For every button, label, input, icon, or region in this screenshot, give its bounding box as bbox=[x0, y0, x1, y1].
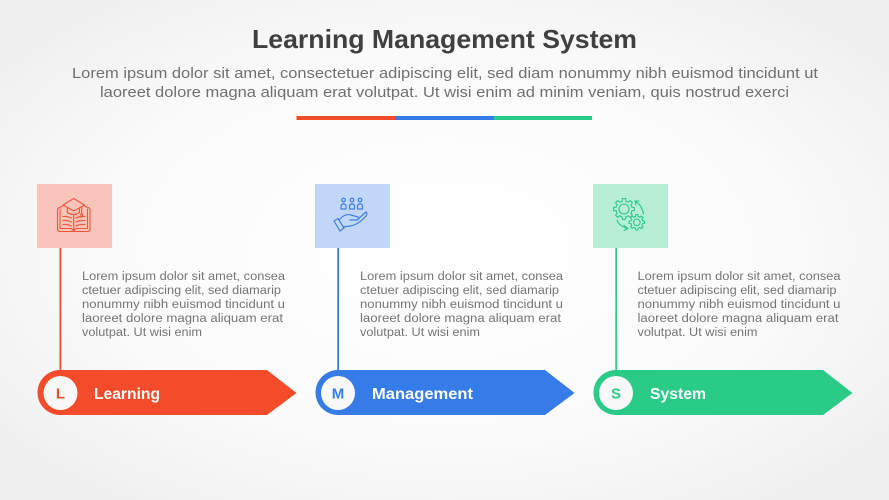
arrow banner: system bbox=[594, 370, 852, 415]
subtitle text: laoreet dolore magna aliquam erat volutpat. Ut wisi enim ad minim veniam, quis nostrud exerci bbox=[100, 84, 789, 101]
body text: learning: Lorem ipsum dolor sit amet, consea bbox=[82, 271, 286, 283]
panel: system bbox=[593, 184, 852, 415]
tricolor divider bbox=[296, 116, 592, 120]
body text: management: ctetuer adipiscing elit, sed diamarip bbox=[360, 285, 559, 297]
letter badge: L bbox=[44, 376, 78, 410]
icon: gears with arrows bbox=[614, 199, 644, 230]
body text: learning: ctetuer adipiscing elit, sed diamarip bbox=[82, 285, 281, 297]
arrow banner: learning bbox=[38, 370, 296, 415]
letter badge: S: S bbox=[611, 386, 621, 402]
body text: learning: nonummy nibh euismod tincidunt u bbox=[82, 299, 285, 311]
icon box: system bbox=[593, 184, 668, 248]
body text: system: volutpat. Ut wisi enim bbox=[638, 327, 758, 339]
subtitle text: Lorem ipsum dolor sit amet, consectetuer adipiscing elit, sed diam nonummy nibh euismod tincidunt ut bbox=[72, 65, 819, 82]
icon box: learning bbox=[37, 184, 112, 248]
icon box: management bbox=[315, 184, 390, 248]
label: System: System bbox=[650, 386, 706, 403]
letter badge: M bbox=[321, 376, 355, 410]
arrow banner: management bbox=[316, 370, 574, 415]
label: Learning: Learning bbox=[94, 386, 160, 403]
panel: management bbox=[315, 184, 574, 415]
body text: learning: laoreet dolore magna aliquam erat bbox=[82, 313, 284, 325]
letter badge: S bbox=[599, 376, 633, 410]
letter badge: M: M bbox=[332, 386, 344, 402]
title: Learning Management System bbox=[252, 24, 637, 54]
body text: management: volutpat. Ut wisi enim bbox=[360, 327, 480, 339]
connector line: system bbox=[615, 248, 617, 373]
body text: learning: volutpat. Ut wisi enim bbox=[82, 327, 202, 339]
panel: learning bbox=[37, 184, 296, 415]
icon: hand holding people bbox=[334, 198, 367, 231]
body text: management: Lorem ipsum dolor sit amet, consea bbox=[360, 271, 564, 283]
body text: learning bbox=[82, 271, 286, 339]
body text: management bbox=[360, 271, 564, 339]
body text: system: Lorem ipsum dolor sit amet, consea bbox=[638, 271, 841, 283]
body text: management: nonummy nibh euismod tincidunt u bbox=[360, 299, 563, 311]
letter badge: L: L bbox=[56, 386, 65, 402]
icon: book with graduation cap bbox=[58, 198, 90, 232]
connector line: learning bbox=[60, 248, 61, 373]
label: Management: Management bbox=[372, 386, 474, 403]
body text: management: laoreet dolore magna aliquam erat bbox=[360, 313, 562, 325]
body text: system: ctetuer adipiscing elit, sed diamarip bbox=[638, 285, 836, 297]
body text: system: laoreet dolore magna aliquam erat bbox=[638, 313, 839, 325]
connector line: management bbox=[337, 248, 339, 373]
subtitle text bbox=[72, 65, 819, 101]
body text: system bbox=[638, 271, 841, 339]
body text: system: nonummy nibh euismod tincidunt u bbox=[638, 299, 840, 311]
